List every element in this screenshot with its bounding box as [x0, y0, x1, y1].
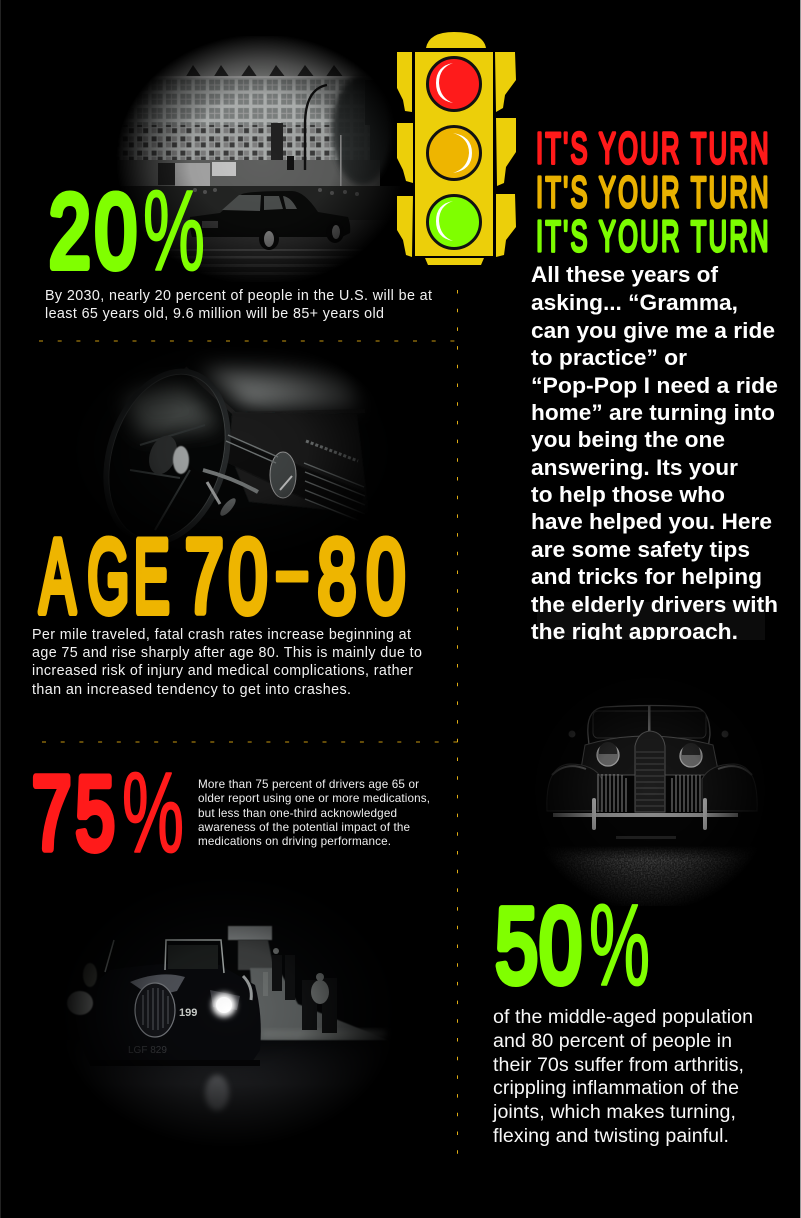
text: age description: increased risk of injury and medical complications, rather: [32, 663, 413, 679]
heading: it's your turn: IT'S YOUR TURN: [536, 211, 771, 261]
text: age description: age 75 and rise sharply after age 80. This is mainly due to: [32, 645, 422, 661]
intro text block: the elderly drivers with: [531, 592, 778, 617]
text: age description: [32, 627, 422, 698]
stat: 75%: 75: [32, 754, 115, 871]
intro text block: “Pop-Pop I need a ride: [531, 373, 778, 398]
intro text block: All these years of: [531, 262, 719, 287]
stat: age 70-80: 80: [318, 518, 405, 634]
text: 50% description: crippling inflammation of the: [493, 1077, 739, 1099]
intro text block: to help those who: [531, 482, 725, 507]
stat: 75%: [32, 750, 184, 877]
text: 20% description: least 65 years old, 9.6 million will be 85+ years old: [45, 306, 384, 322]
text: 75% description: More than 75 percent of drivers age 65 or: [198, 778, 419, 791]
text: 75% description: [198, 778, 430, 848]
text: age description: Per mile traveled, fatal crash rates increase beginning at: [32, 627, 411, 643]
heading: it's your turn: [536, 123, 771, 261]
divider lines: [39, 290, 458, 1160]
intro text block: can you give me a ride: [531, 318, 775, 343]
green light: [428, 196, 480, 248]
text: 75% description: older report using one or more medications,: [198, 792, 430, 805]
photo: steering wheel and dashboard: [104, 356, 365, 539]
text: 50% description: of the middle-aged population: [493, 1006, 753, 1028]
text: 50% description: their 70s suffer from arthritis,: [493, 1054, 744, 1076]
page edge right: [800, 0, 801, 1218]
intro text block: to practice” or: [531, 345, 688, 370]
text: 20% description: [45, 288, 432, 322]
text: 50% description: [492, 1006, 753, 1147]
stat: age 70-80: AGE: [40, 518, 170, 635]
stat: 20%: 20: [49, 174, 137, 290]
intro text block: you being the one: [531, 427, 725, 452]
page edge left: [0, 0, 1, 1218]
text: 75% description: awareness of the potential impact of the: [198, 821, 410, 834]
stat: 75%: %: [122, 750, 184, 877]
photo: vintage car on street: [67, 925, 385, 1124]
intro text block: home” are turning into: [531, 400, 775, 425]
stat: age 70-80: [40, 509, 405, 635]
text: 75% description: medications on driving performance.: [198, 835, 391, 848]
text: 20% description: By 2030, nearly 20 percent of people in the U.S. will be at: [45, 288, 432, 304]
intro text block: asking... “Gramma,: [531, 290, 738, 315]
text: age description: than an increased tendency to get into crashes.: [32, 682, 351, 698]
photo: vintage car on street: 199: [179, 1007, 197, 1019]
stat: age 70-80: –: [277, 509, 308, 626]
photo: vintage car on street: LGF 829: [128, 1045, 167, 1056]
intro text block: have helped you. Here: [531, 509, 772, 534]
amber light: [428, 126, 480, 180]
icon: traffic light: [397, 32, 516, 265]
text: 75% description: but less than one-third acknowledged: [198, 807, 397, 820]
intro text block: and tricks for helping: [531, 564, 762, 589]
stat: 50%: 50: [495, 886, 582, 1005]
intro text block: the right approach.: [531, 619, 738, 644]
stat: age 70-80: 70: [185, 518, 267, 634]
stat: 50%: %: [589, 880, 650, 1010]
photo: city street with taxi: [120, 37, 389, 276]
text: 50% description: flexing and twisting painful.: [493, 1125, 729, 1147]
text: 50% description: joints, which makes turning,: [492, 1101, 736, 1123]
intro text block: are some safety tips: [531, 537, 750, 562]
stat: 20%: [49, 168, 205, 295]
stat: 50%: [495, 880, 650, 1010]
intro text block: [531, 262, 778, 644]
text: 50% description: and 80 percent of people in: [493, 1030, 732, 1052]
photo: vintage car front view: [546, 704, 758, 905]
heading: it's your turn: IT'S YOUR TURN: [536, 123, 771, 173]
heading: it's your turn: IT'S YOUR TURN: [536, 167, 771, 217]
intro text block: answering. Its your: [531, 455, 739, 480]
red light: [428, 58, 480, 110]
stat: 20%: %: [143, 168, 205, 295]
